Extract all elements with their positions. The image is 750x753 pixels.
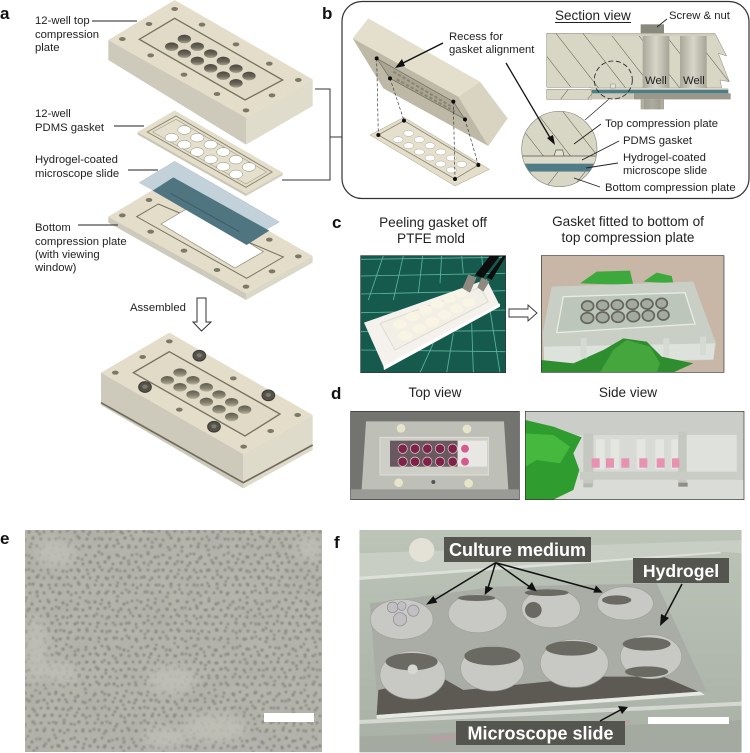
label: bottom plate: window)	[34, 262, 77, 274]
panel label d: d	[331, 384, 341, 403]
magnified section circle	[520, 111, 600, 192]
label: top plate: compression	[35, 29, 99, 41]
recess callout	[395, 31, 555, 145]
arrow: assembled	[193, 298, 211, 331]
top compression plate	[108, 0, 313, 145]
rounded panel frame	[342, 2, 749, 198]
micrograph image	[25, 530, 322, 752]
section labels: Top compression plate	[605, 118, 718, 130]
heading: peeling: PTFE mold	[397, 231, 465, 246]
panel label b: b	[322, 4, 332, 23]
scale bar e	[264, 713, 314, 722]
panel e: cell micrograph	[0, 529, 322, 752]
label: slide	[35, 154, 158, 180]
well labels: Well	[683, 75, 705, 87]
callout: culture medium: Culture medium	[449, 540, 586, 560]
bottom compression plate	[108, 177, 313, 300]
scale bar f	[648, 717, 729, 724]
panel b: alignment and section view	[322, 2, 749, 198]
bracket connector to panel b	[282, 89, 342, 180]
callout: culture medium	[426, 537, 603, 605]
photo: hydrogel with culture medium	[359, 530, 742, 752]
panel c: gasket photographs	[332, 213, 724, 373]
heading: top view: Top view	[409, 385, 462, 400]
panel d: device photographs	[331, 384, 744, 500]
arrow: to fitted gasket	[509, 305, 537, 321]
label: bottom plate: Bottom	[35, 222, 71, 234]
section drawing	[547, 24, 731, 120]
callout: microscope slide: Microscope slide	[467, 724, 614, 744]
label: gasket: 12-well	[35, 108, 71, 120]
small gasket with alignment dashes	[370, 56, 489, 186]
recess callout: gasket alignment	[449, 44, 535, 56]
photo: top view	[351, 411, 519, 500]
heading: gasket fitted: Gasket fitted to bottom of	[552, 214, 704, 229]
callout: microscope slide	[456, 706, 628, 745]
section labels: Hydrogel-coated	[623, 152, 706, 164]
angled top plate	[353, 18, 508, 146]
PDMS gasket	[138, 110, 283, 196]
section labels	[574, 10, 736, 194]
panel f: hydrogel slide photograph	[334, 530, 742, 752]
label: bottom plate: (with viewing	[35, 249, 100, 261]
heading: side view: Side view	[599, 385, 657, 400]
label: slide: microscope slide	[35, 168, 119, 180]
heading: peeling	[379, 215, 487, 246]
section labels: microscope slide	[623, 165, 707, 177]
label: bottom plate: compression plate	[35, 236, 127, 248]
photo: gasket fitted	[541, 256, 724, 372]
label: gasket: PDMS gasket	[35, 122, 105, 134]
photo: peeling gasket	[361, 256, 506, 373]
heading: gasket fitted: top compression plate	[562, 230, 694, 245]
assembled device	[101, 333, 313, 488]
panel label f: f	[334, 533, 340, 552]
panel label a: a	[0, 4, 10, 23]
panel label e: e	[0, 529, 9, 548]
heading: gasket fitted	[552, 214, 704, 245]
section labels: Bottom compression plate	[605, 182, 736, 194]
well labels: Well	[645, 75, 667, 87]
callout: hydrogel: Hydrogel	[643, 561, 719, 581]
section view heading: Section view	[555, 8, 631, 23]
label: bottom plate	[34, 222, 127, 274]
hydrogel-coated microscope slide	[139, 161, 279, 245]
heading: peeling: Peeling gasket off	[379, 215, 487, 230]
callout: hydrogel	[633, 558, 729, 626]
label: slide: Hydrogel-coated	[35, 154, 118, 166]
label: top plate: plate	[35, 42, 60, 54]
section labels: Screw & nut	[669, 10, 731, 22]
panel label c: c	[332, 213, 341, 232]
label: gasket	[35, 108, 144, 134]
label: top plate: 12-well top	[35, 15, 90, 27]
section labels: PDMS gasket	[623, 135, 693, 147]
recess callout: Recess for	[449, 31, 503, 43]
well labels	[645, 75, 705, 87]
photo: side view	[525, 411, 744, 500]
assembled label: Assembled	[130, 302, 186, 314]
panel a: exploded device view	[0, 0, 342, 488]
label: top plate	[35, 15, 137, 54]
